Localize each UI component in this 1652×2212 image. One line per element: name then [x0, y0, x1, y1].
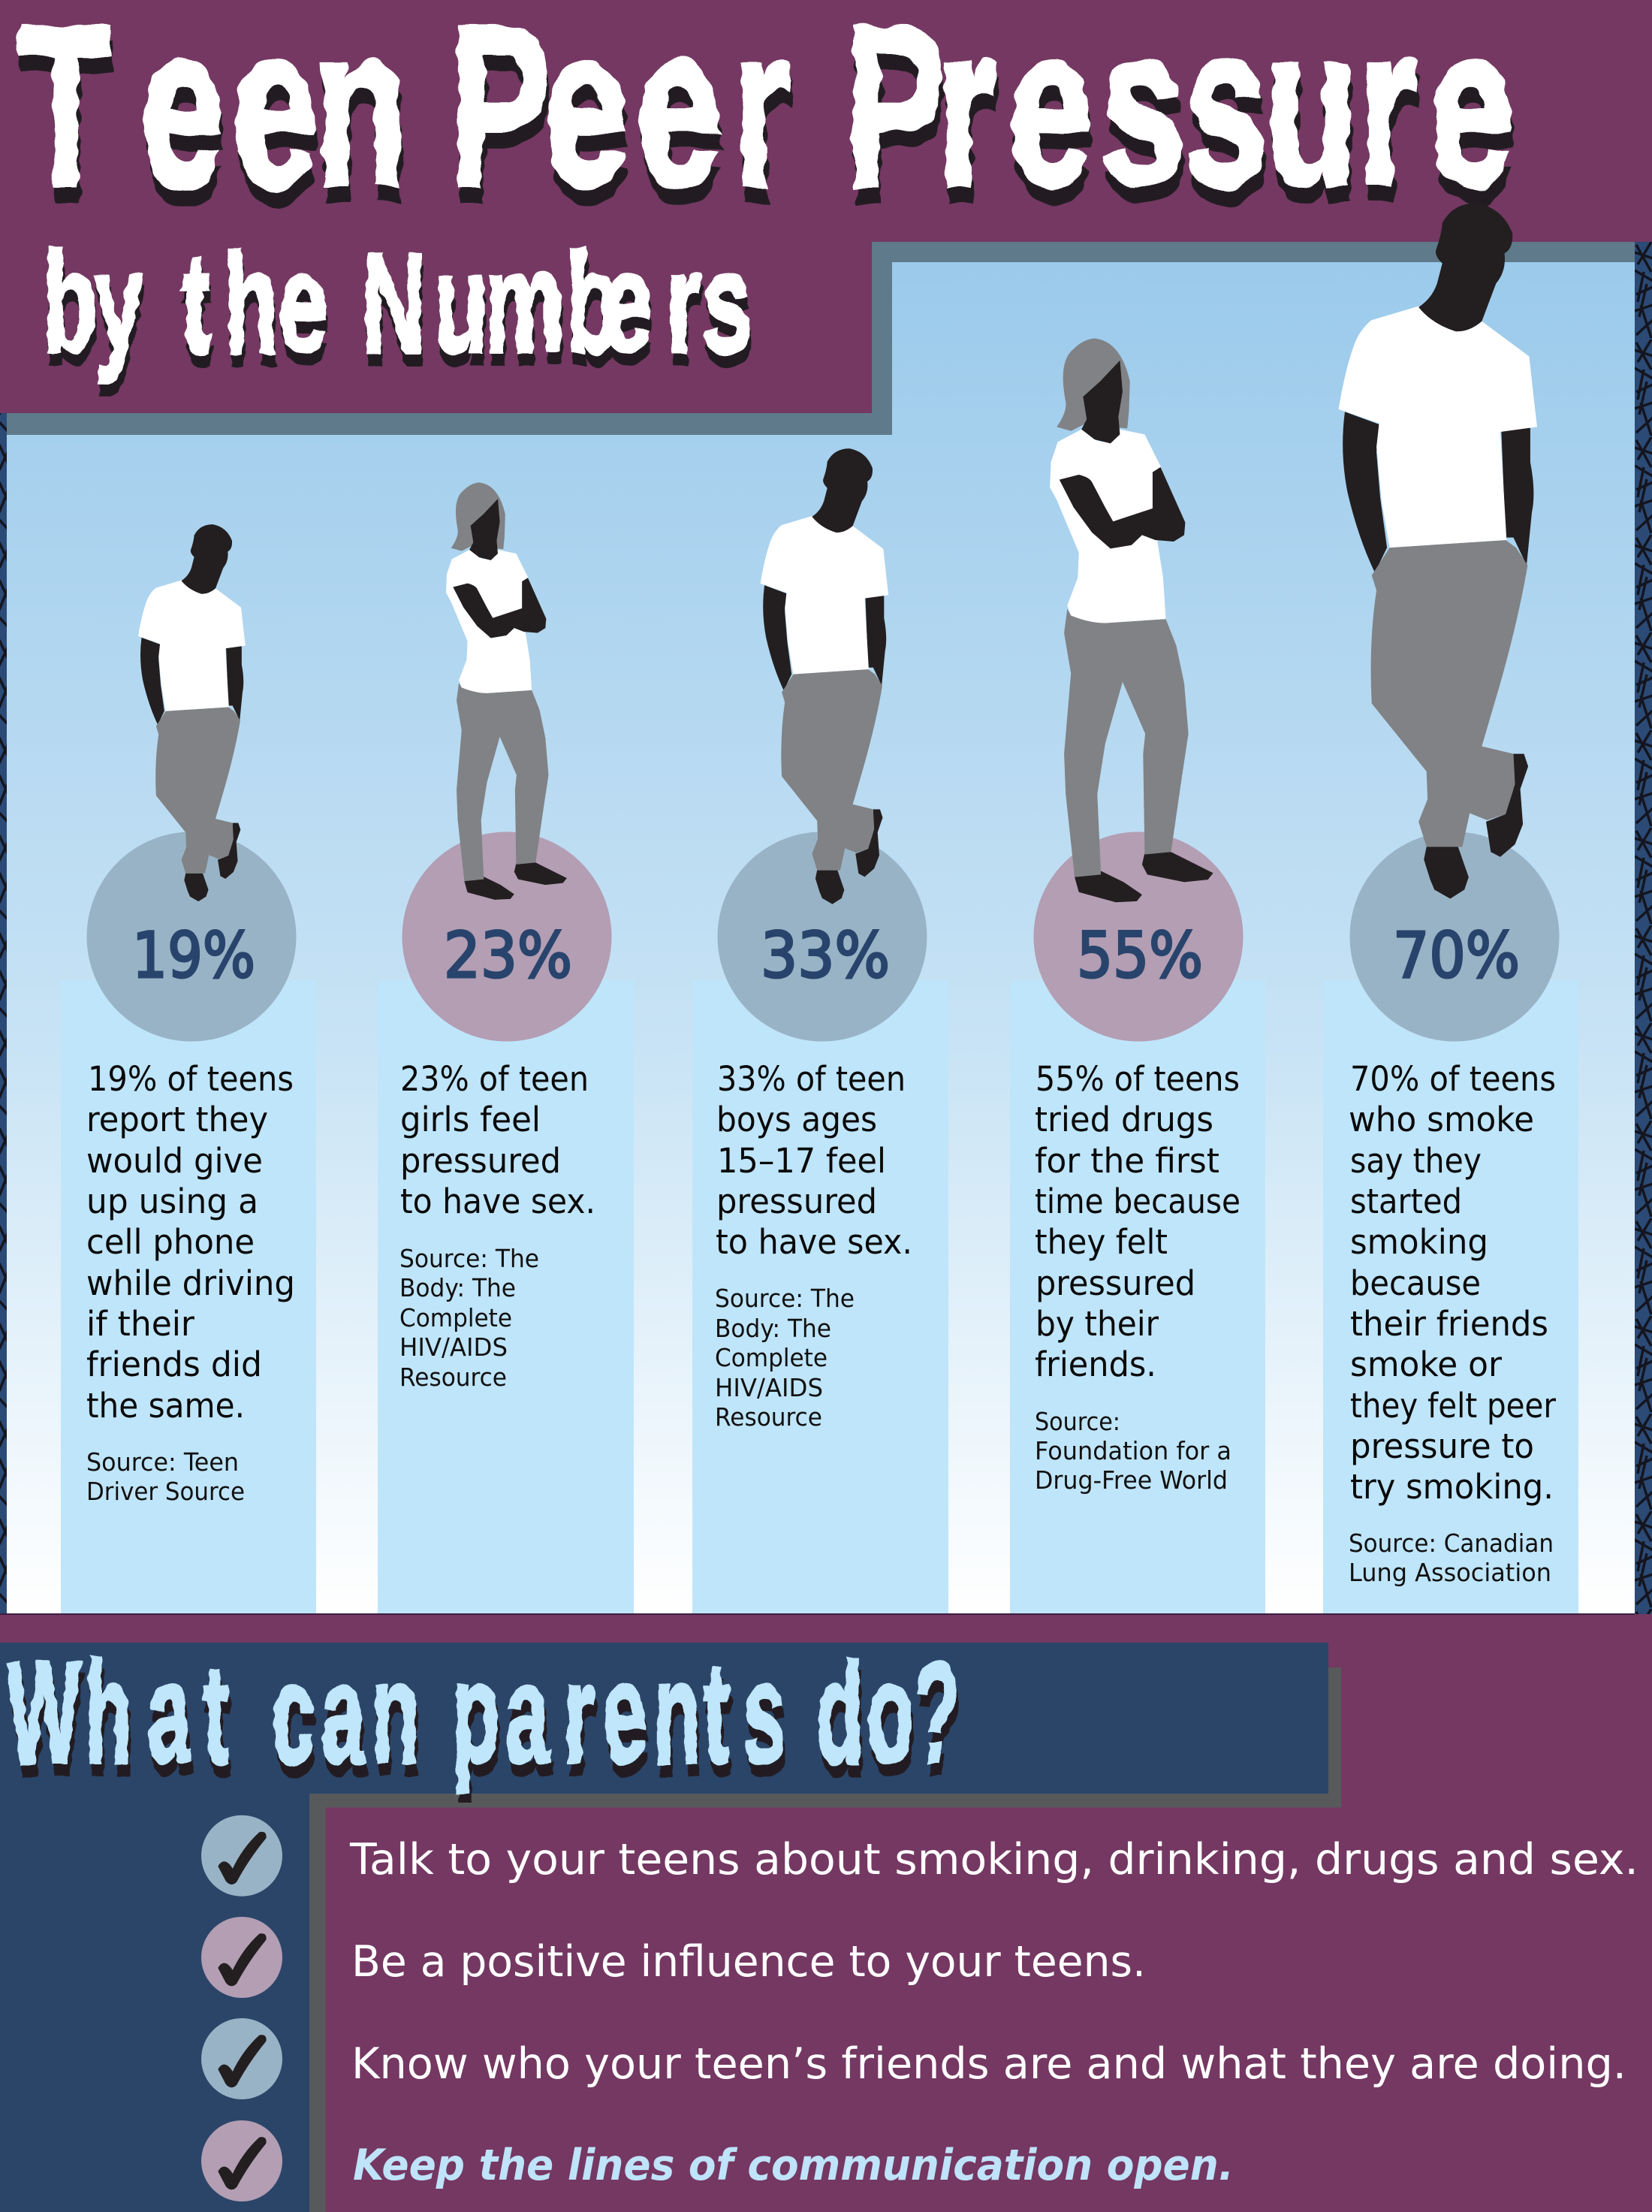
panel: 23% statistic [378, 832, 634, 1614]
icon: check 1 [201, 1815, 282, 1897]
figure: boy, 33% [761, 448, 888, 904]
panel: 19% statistic: the same. [86, 1386, 245, 1426]
panel: 23% statistic: Body: The [399, 1273, 516, 1302]
subtitle: by the Numbers: by the Numbers [43, 223, 752, 382]
panel: 33% statistic: Body: The [715, 1314, 831, 1343]
panel: 19% statistic: while driving [86, 1263, 295, 1303]
panel: 33% statistic: 33% [761, 919, 890, 992]
panel: 55% statistic: for the first [1035, 1141, 1219, 1181]
panel: 33% statistic: 33% of teen [717, 1059, 906, 1099]
panel: 55% statistic: Drug-Free World [1035, 1465, 1228, 1495]
panel: 19% statistic: if their [86, 1304, 194, 1344]
panel: 23% statistic: 23% of teen [400, 1059, 589, 1099]
panel: 19% statistic: friends did [86, 1344, 262, 1384]
panel: 33% statistic: pressured [716, 1181, 877, 1221]
panel: 70% statistic: pressure to [1350, 1426, 1534, 1466]
panel: 23% statistic: pressured [400, 1141, 561, 1181]
panel: 70% statistic: because [1350, 1263, 1481, 1303]
panel: 19% statistic: would give [86, 1141, 263, 1181]
panel: 55% statistic: friends. [1035, 1344, 1156, 1384]
icon: check 2 [201, 1917, 282, 1998]
panel: 33% statistic: boys ages [716, 1100, 877, 1139]
panel: 70% statistic: their friends [1350, 1304, 1548, 1344]
tip 4: emphasised: Keep the lines of communication open. [353, 2141, 1234, 2190]
panel: 23% statistic: girls feel [400, 1100, 541, 1139]
icon: check 4 [201, 2120, 282, 2201]
panel: 70% statistic: Lung Association [1349, 1558, 1551, 1587]
panel: 55% statistic [1010, 832, 1265, 1614]
tip 3: Know who your teen’s friends are and what they are doing. [351, 2039, 1626, 2089]
panel: 23% statistic: 23% [444, 919, 572, 992]
panel: 33% statistic: Complete [715, 1343, 828, 1372]
panel: 55% statistic: pressured [1036, 1263, 1195, 1303]
tip 2: Be a positive influence to your teens. [351, 1937, 1146, 1987]
panel: 70% statistic [1323, 832, 1578, 1614]
panel: 23% statistic: Source: The [399, 1244, 539, 1273]
panel: 70% statistic: who smoke [1349, 1100, 1534, 1139]
panel: 55% statistic: by their [1036, 1304, 1159, 1344]
header block with slate shadow [0, 0, 1652, 435]
panel: 70% statistic: smoking [1350, 1222, 1488, 1262]
sky gradient panel [7, 242, 1635, 1614]
bottom section divider line [0, 1613, 1635, 1615]
panel: 33% statistic: 15–17 feel [717, 1141, 886, 1181]
figure: boy, 19% [138, 524, 246, 901]
panel: 23% statistic: HIV/AIDS [399, 1332, 508, 1362]
panel: 70% statistic: try smoking. [1350, 1467, 1554, 1507]
panel: 33% statistic [692, 832, 948, 1614]
panel: 33% statistic: HIV/AIDS [715, 1373, 823, 1402]
panel: 33% statistic: Resource [715, 1402, 822, 1432]
panel: 55% statistic: Foundation for a [1035, 1436, 1231, 1465]
panel: 19% statistic: cell phone [86, 1222, 255, 1262]
panel: 23% statistic: Resource [399, 1363, 507, 1392]
panel: 70% statistic: they felt peer [1350, 1386, 1556, 1426]
panel: 19% statistic: 19% [132, 919, 255, 992]
panel: 70% statistic: 70% of teens [1350, 1059, 1556, 1099]
figure: girl, 23% [446, 482, 567, 900]
panel: what can parents do header and sidebar [0, 1643, 1341, 2212]
panel: 55% statistic: Source: [1035, 1407, 1120, 1436]
figure: girl, 55% [1050, 338, 1213, 902]
figure: boy, 70% [1339, 203, 1537, 899]
panel: 55% statistic: time because [1035, 1181, 1241, 1221]
icon: check 3 [201, 2018, 282, 2099]
panel: 70% statistic: say they [1350, 1141, 1482, 1181]
panel: 19% statistic: Source: Teen [86, 1447, 239, 1477]
panel: 55% statistic: 55% of teens [1036, 1059, 1240, 1099]
panel: 55% statistic: tried drugs [1035, 1100, 1213, 1139]
panel: 19% statistic [61, 832, 316, 1614]
panel: 33% statistic: Source: The [715, 1284, 855, 1313]
panel: 19% statistic: report they [86, 1100, 268, 1139]
panel: 70% statistic: Source: Canadian [1349, 1528, 1554, 1558]
panel: 19% statistic: Driver Source [86, 1477, 245, 1506]
heading: What can parents do?: What can parents do? [8, 1634, 960, 1793]
panel: 70% statistic: smoke or [1350, 1344, 1502, 1384]
panel: 55% statistic: 55% [1077, 919, 1203, 992]
tip 1: Talk to your teens about smoking, drinking, drugs and sex. [349, 1835, 1638, 1885]
panel: 23% statistic: to have sex. [400, 1181, 595, 1221]
panel: 70% statistic: 70% [1393, 919, 1520, 992]
panel: 23% statistic: Complete [399, 1303, 512, 1332]
panel: 70% statistic: started [1350, 1181, 1462, 1221]
panel: 19% statistic: 19% of teens [88, 1059, 294, 1099]
panel: 19% statistic: up using a [86, 1181, 258, 1221]
panel: 55% statistic: they felt [1035, 1222, 1168, 1262]
panel: 33% statistic: to have sex. [716, 1222, 912, 1262]
patterned side strips [0, 242, 1652, 1614]
